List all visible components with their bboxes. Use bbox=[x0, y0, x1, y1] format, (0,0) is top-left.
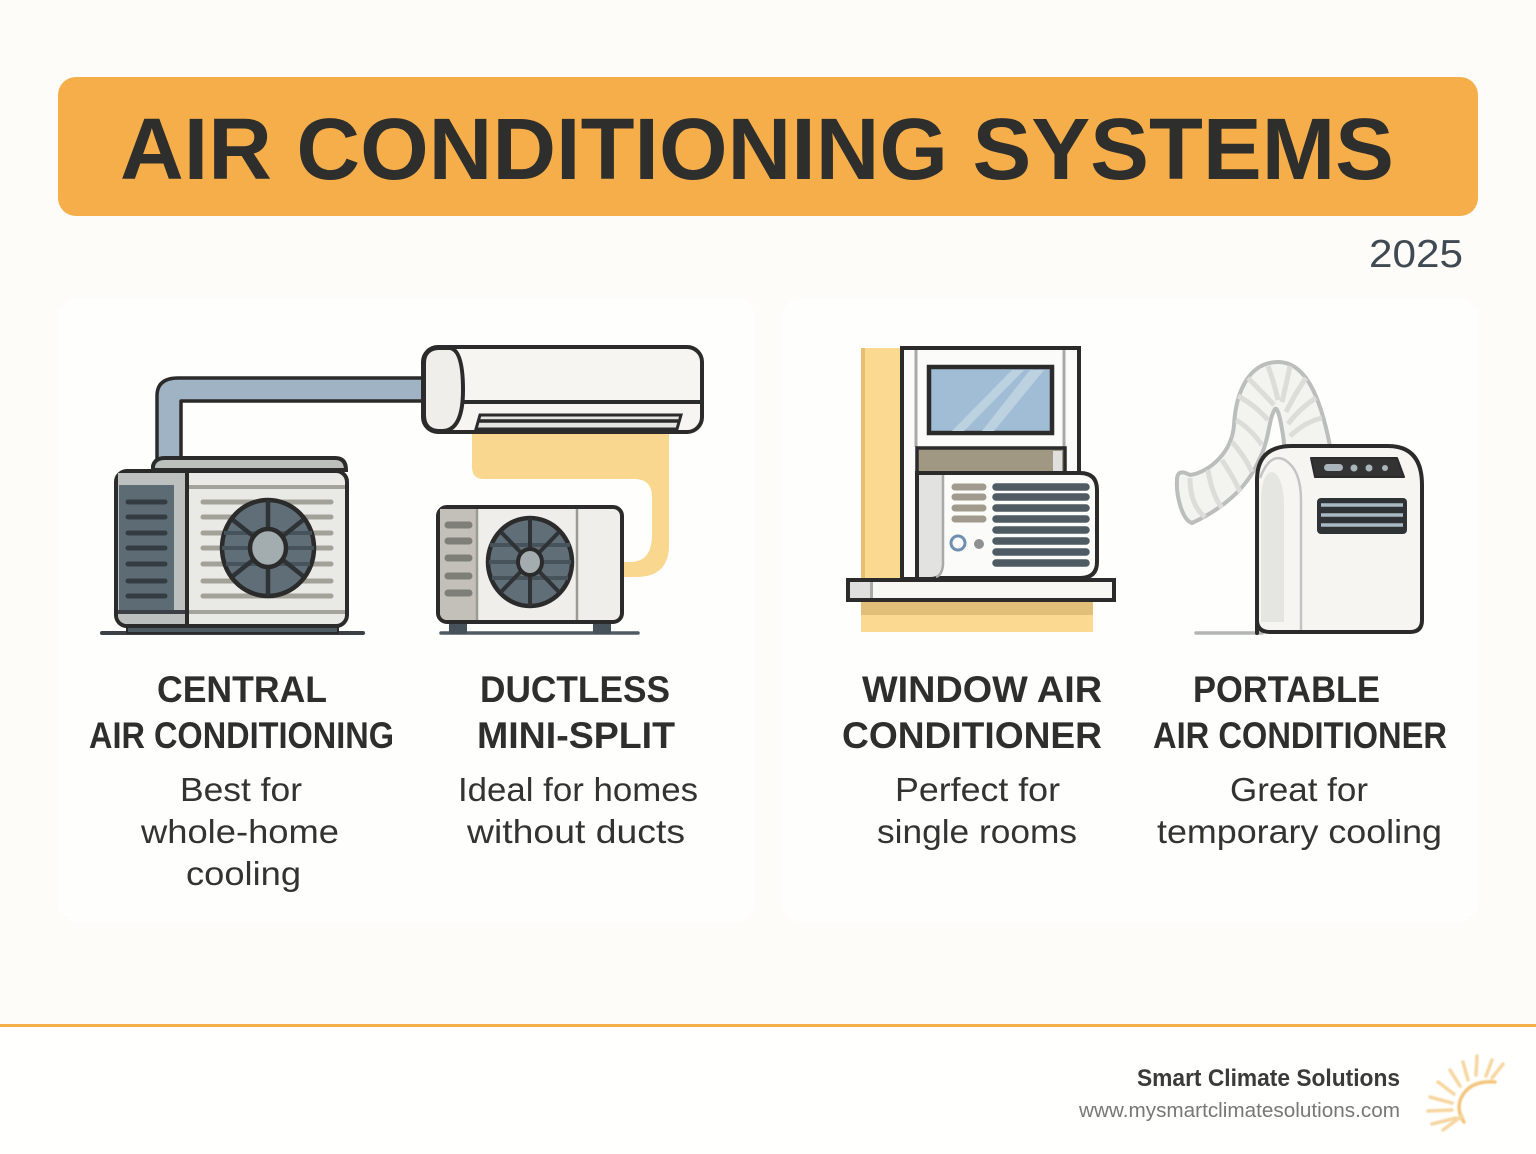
year label: 2025 bbox=[1369, 233, 1463, 276]
text: window description: single rooms bbox=[877, 813, 1077, 850]
title banner bbox=[58, 77, 1478, 216]
title banner: AIR CONDITIONING SYSTEMS bbox=[120, 101, 1394, 198]
label: window air conditioner: WINDOW AIR bbox=[862, 669, 1102, 710]
icon: mini-split outdoor unit bbox=[438, 507, 638, 634]
text: ductless description: without ducts bbox=[466, 813, 685, 850]
label: ductless mini-split bbox=[477, 669, 675, 756]
text: ductless description: Ideal for homes bbox=[458, 771, 698, 808]
text: ductless description bbox=[458, 771, 698, 850]
text: central description: whole-home bbox=[140, 813, 339, 850]
text: portable description bbox=[1157, 771, 1442, 850]
text: window description bbox=[877, 771, 1077, 850]
label: portable air conditioner: AIR CONDITIONER bbox=[1153, 715, 1447, 756]
text: window description: Perfect for bbox=[895, 771, 1060, 808]
label: central air conditioning: CENTRAL bbox=[157, 669, 327, 710]
footer bbox=[0, 1024, 1536, 1154]
text: central description bbox=[140, 771, 339, 892]
footer brand name: Smart Climate Solutions bbox=[1137, 1065, 1400, 1092]
label: window air conditioner: CONDITIONER bbox=[842, 715, 1102, 756]
label: central air conditioning: AIR CONDITIONING bbox=[89, 715, 394, 756]
panel: central and ductless systems bbox=[58, 298, 755, 922]
label: portable air conditioner: PORTABLE bbox=[1193, 669, 1380, 710]
panel: window and portable systems bbox=[782, 298, 1478, 922]
label: ductless mini-split: MINI-SPLIT bbox=[477, 715, 675, 756]
footer url: www.mysmartclimatesolutions.com bbox=[1078, 1100, 1400, 1122]
text: central description: cooling bbox=[186, 855, 301, 892]
icon: sun logo bbox=[1428, 1056, 1503, 1130]
text: portable description: Great for bbox=[1230, 771, 1368, 808]
icon: window air conditioner bbox=[848, 348, 1114, 632]
text: central description: Best for bbox=[180, 771, 302, 808]
icon: central outdoor condenser bbox=[102, 458, 363, 633]
label: window air conditioner bbox=[842, 669, 1102, 756]
label: ductless mini-split: DUCTLESS bbox=[480, 669, 670, 710]
text: portable description: temporary cooling bbox=[1157, 813, 1442, 850]
label: central air conditioning bbox=[89, 669, 394, 756]
icon: mini-split indoor unit with yellow airflow and refrigerant pipe bbox=[157, 347, 702, 577]
label: portable air conditioner bbox=[1153, 669, 1447, 756]
icon: portable air conditioner with exhaust hose bbox=[1177, 362, 1422, 633]
